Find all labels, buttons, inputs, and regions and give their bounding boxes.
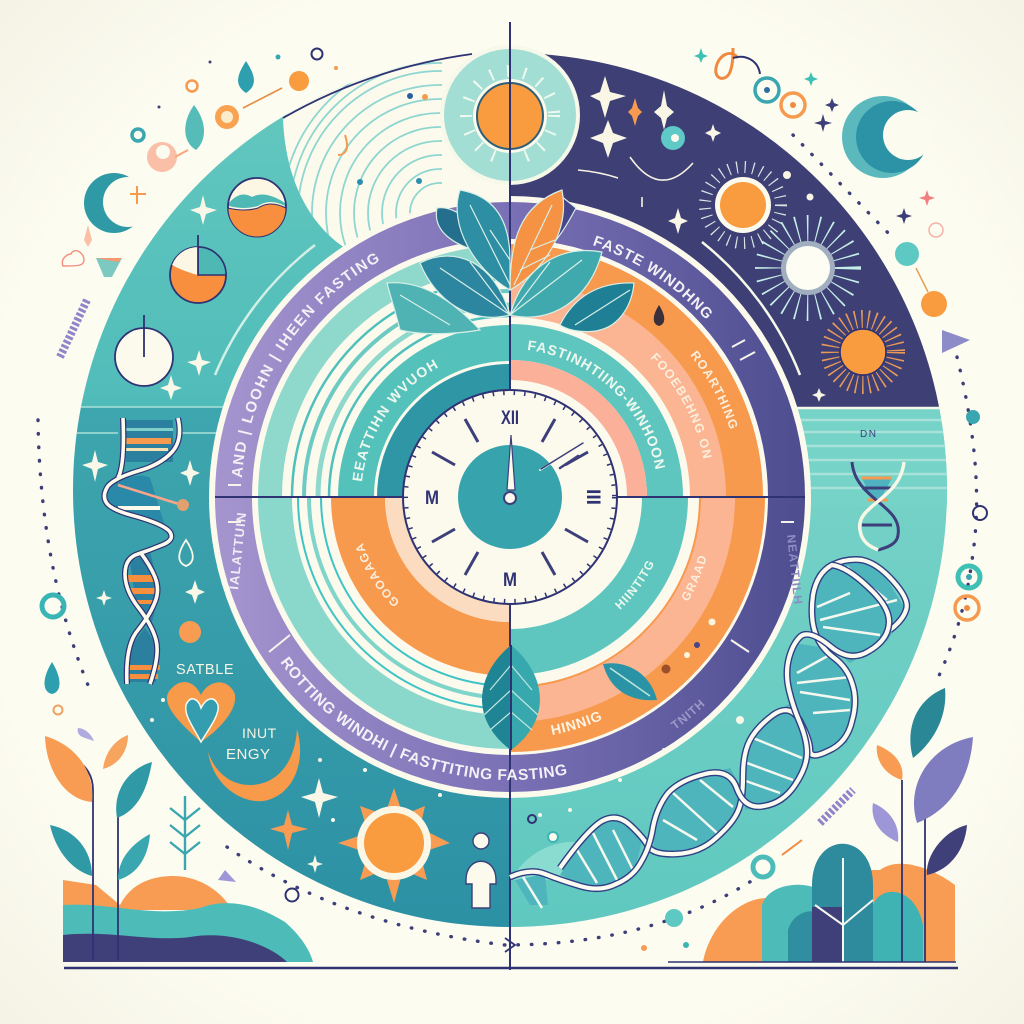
clock hands	[504, 435, 583, 504]
panel: water lines right	[797, 406, 947, 507]
panel: top right orange ring	[511, 244, 763, 496]
panel: bottom-left plants	[42, 595, 313, 962]
icon: bottom sun	[338, 788, 450, 903]
label: right lower: NEATTIILH	[784, 534, 805, 606]
panel: bottom right orange ring	[511, 498, 765, 752]
icon: left pies	[115, 178, 286, 386]
icon: person	[466, 833, 496, 908]
panel: bottom left orange ring	[331, 498, 509, 674]
ring dividers	[215, 496, 805, 498]
icon: white starburst	[768, 228, 848, 308]
ring labels	[226, 236, 805, 780]
icon: stars bottom left	[82, 195, 744, 873]
icon: lavender sprig	[60, 300, 87, 357]
icon: star	[590, 120, 627, 158]
icon: heart	[167, 682, 235, 742]
icon: top leaves	[387, 190, 634, 334]
panel: concentric rings	[209, 190, 811, 970]
clock numerals: III	[582, 489, 603, 505]
icon: night small stars	[668, 124, 826, 402]
label: top right ring: FASTE WINDHNG	[593, 236, 712, 318]
label: energy: ENGY	[226, 746, 271, 763]
decorative orbit arcs in disc	[215, 242, 800, 375]
icon: bottom leaf	[482, 645, 540, 750]
clock	[403, 390, 617, 604]
left horizon lines	[70, 407, 230, 433]
icon: plant right	[872, 688, 973, 962]
decor	[218, 870, 236, 882]
icon: setting sun with rays	[830, 319, 896, 385]
label: left ring: AND | LOOHN | IHEEN FASTING	[232, 254, 379, 478]
clock numerals	[425, 408, 603, 591]
icon: star small	[654, 90, 674, 130]
label: bottom ring: ROTTING WINDHI | FASTTITING FASTING	[280, 656, 566, 780]
icon: small hills	[512, 815, 600, 880]
icon: half bowl	[228, 178, 286, 237]
label: inner right: FASTINHTIING-WINHOON	[528, 340, 665, 470]
icon: night suns	[578, 76, 896, 402]
icon: quarter pie	[170, 235, 226, 303]
icon: left moon	[84, 173, 153, 233]
panel: purple outer ring	[215, 202, 805, 792]
icon: crescent	[208, 729, 300, 801]
label: DN: DN	[860, 429, 877, 440]
panel: top right night quadrant	[510, 40, 960, 407]
icon: big star	[590, 76, 626, 118]
ground	[703, 864, 955, 962]
icon: small leaf	[603, 618, 716, 700]
icon: big DNA helix	[510, 558, 907, 908]
label: teal lower right: HIINTITG	[614, 561, 654, 610]
label: orange right lower: GRAAD	[682, 556, 706, 600]
panel: bottom-right plants	[703, 688, 973, 962]
icon: arch tree	[812, 844, 873, 962]
icon: small clock	[115, 315, 173, 386]
icon: right small DNA	[852, 462, 904, 550]
clock centre disc	[458, 445, 562, 549]
panel: bottom left ring lines	[258, 498, 509, 749]
label: stable: SATBLE	[176, 662, 234, 678]
clock numerals: M	[503, 570, 517, 591]
panel: top right decor	[694, 48, 987, 520]
panel: main disc quadrants	[60, 40, 960, 937]
label: bottom right: TNITH	[670, 700, 705, 728]
icon: fern	[170, 796, 200, 870]
bottom baseline	[64, 938, 958, 968]
panel: outer dotted orbit	[38, 135, 977, 945]
panel: top left ring lines	[258, 248, 509, 496]
panel: bottom right quadrant	[510, 407, 960, 937]
icon: top right moon	[842, 96, 933, 178]
label: orange bottom left: GOOAAGA	[356, 543, 398, 606]
label: input energy: INUT	[242, 725, 277, 741]
clock ticks	[432, 419, 588, 575]
icon: top sun	[440, 22, 580, 190]
icon: drop on orange ring	[654, 305, 664, 326]
icon: orange sun with ticks	[705, 167, 781, 243]
panel: top left teal ring	[338, 325, 509, 496]
clock numerals: M	[425, 488, 439, 509]
icon: lavender sprig	[820, 790, 853, 823]
panel: top swirl lines	[283, 54, 509, 246]
label: orange bottom: HINNIG	[550, 712, 602, 735]
icon: crescent line	[578, 157, 693, 207]
clock numerals: XII	[501, 408, 519, 429]
icon: plant	[45, 728, 152, 960]
panel: top left decor	[60, 48, 472, 357]
ring ticks	[228, 340, 794, 652]
icon: planet	[661, 126, 685, 150]
panel: bottom left quadrant	[60, 407, 510, 937]
label: left lower: IALATTUIN	[226, 511, 249, 590]
icon: left DNA helix	[104, 418, 189, 684]
icon: triangle	[96, 258, 122, 277]
label: orange inner band: FOOEBEHNG ON	[650, 352, 712, 458]
icon: orange star	[628, 98, 642, 126]
panel: top left day quadrant	[81, 54, 476, 406]
label: orange outer band: ROARTHING	[690, 350, 738, 429]
ground	[63, 876, 232, 910]
icon: cloud	[62, 251, 84, 266]
panel: right side rings	[641, 566, 980, 951]
label: inner left: EEATTIHN WVUOH	[352, 359, 438, 482]
